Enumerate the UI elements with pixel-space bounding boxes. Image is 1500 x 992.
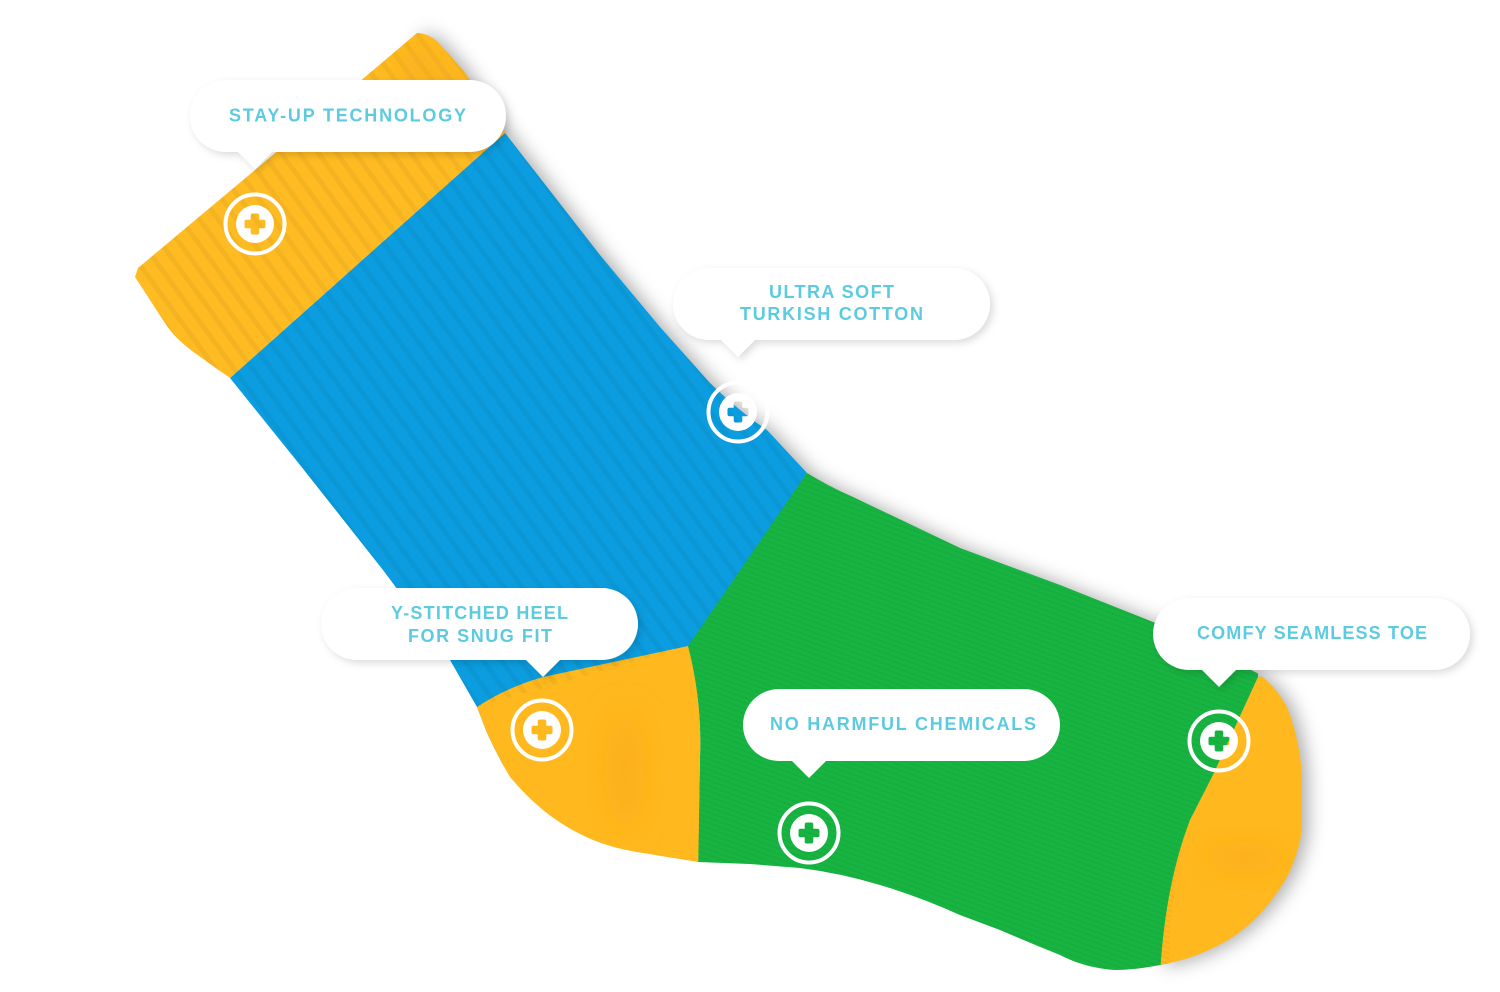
callout: y-stitched heel for snug fit: FOR SNUG FIT [408, 626, 552, 646]
marker: stay-up technology [226, 194, 284, 254]
sock cuff: yellow [135, 33, 505, 378]
callout: comfy seamless toe [1153, 598, 1470, 687]
heel shading [605, 710, 645, 830]
callout: ultra soft turkish cotton: ULTRA SOFT [769, 282, 894, 302]
callout: y-stitched heel for snug fit [321, 588, 638, 677]
knit texture on foot [1161, 826, 1188, 964]
callout: ultra soft turkish cotton [673, 268, 990, 357]
callout: no harmful chemicals [743, 689, 1060, 778]
sock leg: blue [230, 133, 807, 766]
marker: y-stitched heel [512, 700, 572, 760]
marker: no harmful chemicals [780, 804, 838, 862]
callout: no harmful chemicals: NO HARMFUL CHEMICALS [770, 714, 1036, 734]
marker: comfy seamless toe [1190, 712, 1248, 770]
callout: stay-up technology [190, 80, 506, 169]
marker: ultra soft turkish cotton [708, 382, 768, 442]
callout: comfy seamless toe: COMFY SEAMLESS TOE [1197, 623, 1427, 643]
sock shadow [306, 34, 1308, 966]
sock heel: yellow [477, 646, 700, 862]
sock foot: green [688, 473, 1258, 970]
callout: stay-up technology: STAY-UP TECHNOLOGY [229, 106, 466, 126]
rib texture on leg and cuff [100, 10, 807, 707]
toe shading [1203, 842, 1287, 874]
sock toe: yellow [1160, 676, 1302, 965]
callout: y-stitched heel for snug fit: Y-STITCHED HEEL [391, 603, 568, 623]
cuff shading [400, 44, 404, 48]
callout: ultra soft turkish cotton: TURKISH COTTON [740, 304, 923, 324]
